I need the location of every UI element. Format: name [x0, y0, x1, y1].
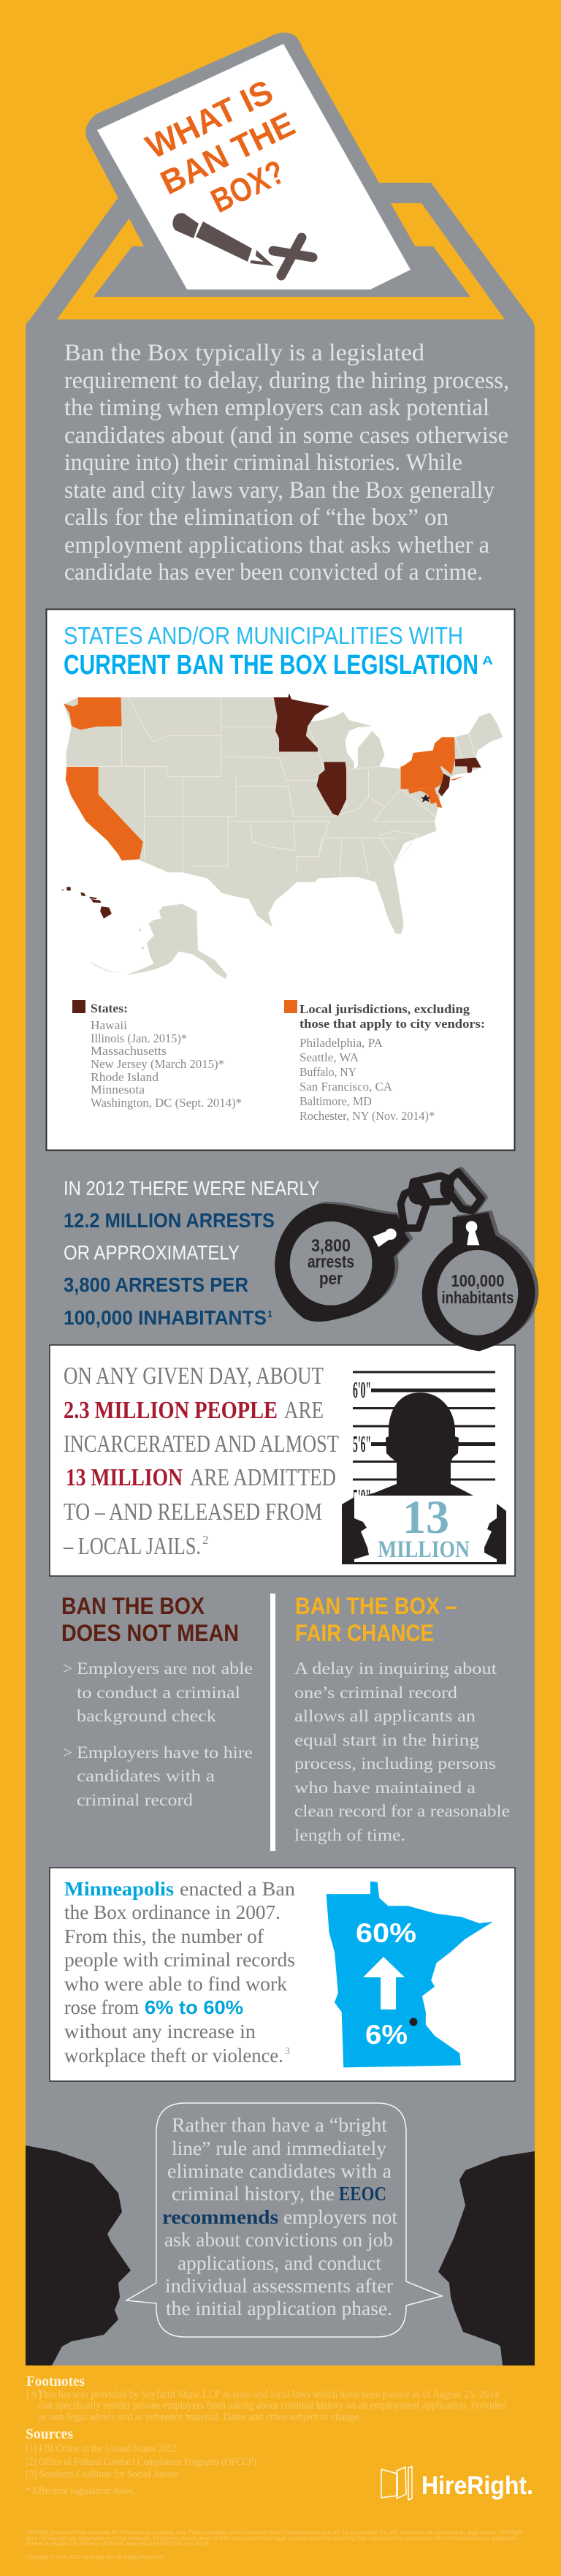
icon: handcuffs [275, 1170, 538, 1351]
legend: states: Washington, DC (Sept. 2014)* [91, 1096, 242, 1110]
icon: pen marking an X [172, 213, 313, 276]
sources: * Effective legislation dates. [26, 2485, 135, 2497]
chart: US map [61, 693, 503, 934]
state: Washington [64, 697, 122, 730]
footnotes: as non-legal advice and as reference material. Dates and cities subject to change. [38, 2412, 362, 2423]
text block: incarceration: 13 MILLION [66, 1464, 183, 1491]
text block: arrests statistics: 100,000 INHABITANTS [64, 1306, 267, 1329]
text block: fair chance description [294, 1659, 510, 1844]
text block: incarceration: ARE ADMITTED [190, 1464, 336, 1491]
text block: Minneapolis ordinance: who were able to find work [64, 1973, 287, 1995]
disclaimer: of laws or regulations and any additional legal requirements that may apply. [26, 2539, 210, 2547]
icon: Minnesota map with 6% to 60%: 6% [365, 2020, 408, 2050]
text block: arrests statistics: 12.2 MILLION ARRESTS [64, 1209, 275, 1232]
legend: states: New Jersey (March 2015)* [91, 1057, 224, 1071]
list: what it does not mean: > [63, 1743, 72, 1762]
text block: EEOC recommendation: criminal history, the [172, 2183, 335, 2205]
list: what it does not mean: Employers are not able [77, 1659, 253, 1678]
text block: introduction [64, 340, 509, 586]
handcuff labels: per [319, 1269, 343, 1289]
legend: states: Massachusetts [91, 1044, 167, 1058]
handcuff labels: 3,800 [311, 1236, 351, 1256]
heading: ban the box does not mean: BAN THE BOX [61, 1593, 205, 1619]
panel: main grey column [26, 319, 535, 2365]
text block: fair chance description: length of time. [294, 1826, 405, 1844]
list: what it does not mean: candidates with a [77, 1767, 215, 1785]
panel: does not mean [61, 1593, 253, 1809]
list: what it does not mean: Employers have to hire [77, 1743, 253, 1762]
sources: Sources [26, 2426, 73, 2442]
text block: introduction: Ban the Box typically is a legislated [64, 340, 425, 366]
icon: mugshot silhouette holding sign: 13 [402, 1491, 449, 1544]
list: what it does not mean: > [63, 1659, 72, 1678]
text block: EEOC recommendation: ask about convictions on job [164, 2229, 393, 2251]
text block: Minneapolis ordinance: From this, the number of [64, 1925, 264, 1947]
text block: Minneapolis ordinance: Minneapolis [64, 1878, 174, 1900]
text block: arrests statistics: 3,800 ARRESTS PER [64, 1273, 248, 1296]
legend: states: Rhode Island [91, 1070, 159, 1084]
text block: incarceration: TO – AND RELEASED FROM [64, 1499, 322, 1526]
text block: EEOC recommendation: individual assessments after [165, 2275, 393, 2297]
legend: states: Minnesota [91, 1083, 145, 1096]
state: Hawaii [61, 887, 112, 919]
text block: fair chance description: one’s criminal record [294, 1683, 458, 1702]
footnotes: This list was provided by Seyfarth Shaw LLP as state and local laws which have been passed as of August 25, 2014 [38, 2389, 499, 2401]
text block: EEOC recommendation: applications, and conduct [178, 2252, 382, 2274]
text block: Minneapolis ordinance: rose from [64, 1996, 139, 2018]
callout: EEOC speech bubble [126, 2103, 442, 2337]
handcuff labels [308, 1236, 514, 1307]
text block: EEOC recommendation: recommends [162, 2206, 278, 2228]
icon: mugshot silhouette holding sign: 5'0" [353, 1484, 371, 1510]
heading: ban the box does not mean: DOES NOT MEAN [61, 1620, 239, 1646]
state: Alaska [89, 904, 227, 979]
panel: incarceration statistics [50, 1345, 515, 1576]
legend: local jurisdictions: Rochester, NY (Nov. 2014)* [299, 1109, 435, 1123]
list: what it does not mean: criminal record [77, 1791, 194, 1809]
text block: introduction: the timing when employers can ask potential [64, 395, 489, 421]
handcuff labels: arrests [308, 1252, 354, 1272]
text block: EEOC recommendation: Rather than have a “bright [172, 2114, 388, 2136]
text block: EEOC recommendation: employers not [283, 2206, 397, 2228]
list: what it does not mean [63, 1659, 253, 1809]
legend: local jurisdictions: those that apply to city vendors: [299, 1017, 485, 1031]
sources [26, 2426, 256, 2497]
heading: states and municipalities: STATES AND/OR MUNICIPALITIES WITH [64, 622, 463, 649]
legend: local jurisdictions: Philadelphia, PA [299, 1036, 383, 1050]
icon: left head silhouette [26, 2145, 131, 2365]
text block: arrests statistics: IN 2012 THERE WERE NEARLY [64, 1177, 319, 1200]
text block: Minneapolis ordinance: 6% to 60% [145, 1996, 243, 2018]
title: what is ban the box: WHAT IS [140, 72, 279, 166]
icon: Washington DC star [421, 795, 431, 802]
legend: local jurisdictions: San Francisco, CA [299, 1080, 393, 1094]
states: New Jersey, Massachusetts, Rhode Island [438, 758, 481, 796]
icon: mugshot silhouette holding sign: 5'6" [353, 1431, 371, 1457]
text block: introduction: employment applications that asks whether a [64, 532, 489, 558]
sources: [2] Office of Federal Contract Compliance Programs (OFCCP) [26, 2456, 256, 2468]
state: Illinois [316, 762, 346, 816]
legend: states: Hawaii [91, 1018, 127, 1032]
icon: mugshot silhouette holding sign [342, 1371, 506, 1564]
sources: [3] Southern Coalition for Social Justice [26, 2469, 179, 2480]
title: what is ban the box: BOX? [205, 152, 291, 220]
legend: local jurisdictions: Buffalo, NY [299, 1065, 356, 1079]
legend: local jurisdictions: Seattle, WA [299, 1050, 359, 1064]
text block: EEOC recommendation [162, 2114, 397, 2319]
title: what is ban the box [140, 72, 300, 220]
icon: mugshot silhouette holding sign: MILLION [378, 1537, 470, 1563]
legend: local jurisdictions: Baltimore, MD [299, 1094, 372, 1108]
logo: HireRight [381, 2466, 533, 2500]
footnotes: [A] [26, 2389, 42, 2401]
handcuff labels: inhabitants [441, 1288, 514, 1307]
text block: EEOC recommendation: line” rule and immediately [172, 2137, 386, 2159]
text block: incarceration: – LOCAL JAILS. [63, 1533, 201, 1560]
heading: states and municipalities [64, 622, 493, 681]
legend: local jurisdictions: Local jurisdictions, excluding [299, 1002, 470, 1016]
panel: fair chance [294, 1593, 510, 1844]
text block: Minneapolis ordinance: the Box ordinance in 2007. [64, 1901, 280, 1923]
heading: ban the box fair chance [295, 1593, 457, 1646]
disclaimer [26, 2528, 523, 2561]
footnotes [26, 2374, 506, 2423]
footnotes: Footnotes [26, 2374, 85, 2390]
legend: states: Illinois (Jan. 2015)* [91, 1031, 187, 1045]
text block: incarceration: ON ANY GIVEN DAY, ABOUT [64, 1363, 324, 1390]
text block: Minneapolis ordinance: without any increase in [64, 2020, 256, 2042]
text block: Minneapolis ordinance [64, 1878, 296, 2067]
footnotes: that specifically restrict private employers from asking about criminal history on an employment application. Provided [38, 2400, 506, 2412]
text block: introduction: candidate has ever been convicted of a crime. [64, 559, 483, 586]
text block: introduction: requirement to delay, during the hiring process, [64, 368, 509, 394]
legend: states [72, 1000, 242, 1110]
disclaimer: Copyright © 2005-2014 HireRight, Inc. All Rights Reserved [26, 2553, 163, 2561]
panel: Minneapolis [50, 1868, 515, 2081]
text block: Minneapolis ordinance: people with criminal records [64, 1949, 295, 1971]
icon: mugshot silhouette holding sign: 6'0" [353, 1376, 371, 1403]
icon: right head silhouette [438, 2151, 535, 2365]
text block: arrests statistics: OR APPROXIMATELY [64, 1241, 240, 1264]
text block: arrests statistics: 1 [267, 1308, 272, 1319]
logo: HireRight: HireRight. [421, 2471, 533, 2500]
text block: Minneapolis ordinance: 3 [285, 2046, 290, 2057]
text block: introduction: calls for the elimination of “the box” on [64, 504, 449, 531]
icon: Minnesota map with 6% to 60%: 60% [356, 1918, 416, 1948]
text block: EEOC recommendation: the initial application phase. [166, 2297, 392, 2319]
legend: local jurisdictions [284, 1000, 485, 1123]
heading: ban the box fair chance: BAN THE BOX – [295, 1593, 457, 1619]
text block: arrests statistics [64, 1177, 319, 1329]
state: California [66, 767, 143, 860]
text block: fair chance description: equal start in the hiring [294, 1731, 480, 1749]
state: Minnesota [274, 693, 329, 751]
heading: states and municipalities: A [482, 654, 493, 667]
icon: ballot box with paper [28, 32, 533, 322]
handcuff labels: 100,000 [451, 1271, 504, 1290]
list: what it does not mean: background check [77, 1707, 217, 1725]
text block: fair chance description: process, including persons [294, 1754, 496, 1773]
panel: legislation map [47, 610, 514, 1151]
list: what it does not mean: to conduct a criminal [77, 1683, 240, 1702]
heading: ban the box fair chance: FAIR CHANCE [295, 1620, 434, 1646]
text block: Minneapolis ordinance: workplace theft or violence. [64, 2045, 283, 2067]
text block: Minneapolis ordinance: enacted a Ban [180, 1878, 296, 1900]
text block: introduction: inquire into) their criminal histories. While [64, 450, 462, 476]
text block: fair chance description: allows all applicants an [294, 1707, 476, 1725]
legend: states: States: [91, 1001, 128, 1015]
jurisdictions: New York, Pennsylvania, Maryland [401, 737, 463, 808]
text block: EEOC recommendation: eliminate candidates with a [167, 2160, 392, 2182]
text block: introduction: candidates about (and in some cases otherwise [64, 423, 508, 449]
text block: incarceration: ARE [284, 1397, 324, 1424]
text block: incarceration: INCARCERATED AND ALMOST [64, 1431, 339, 1458]
text block: incarceration: 2.3 MILLION PEOPLE [64, 1397, 278, 1424]
text block: introduction: state and city laws vary, Ban the Box generally [64, 477, 495, 504]
text block: incarceration [63, 1363, 339, 1560]
text block: fair chance description: A delay in inquiring about [294, 1659, 497, 1678]
text block: fair chance description: clean record for a reasonable [294, 1802, 510, 1820]
text block: EEOC recommendation: EEOC [339, 2183, 386, 2205]
text block: fair chance description: who have maintained a [294, 1778, 476, 1797]
icon: Minnesota map with 6% to 60% [327, 1882, 493, 2067]
heading: ban the box does not mean [61, 1593, 239, 1646]
title: what is ban the box: BAN THE [155, 105, 300, 202]
text block: incarceration: 2 [202, 1533, 209, 1547]
sources: [1] FBI Crime in the United States 2012 [26, 2443, 177, 2455]
